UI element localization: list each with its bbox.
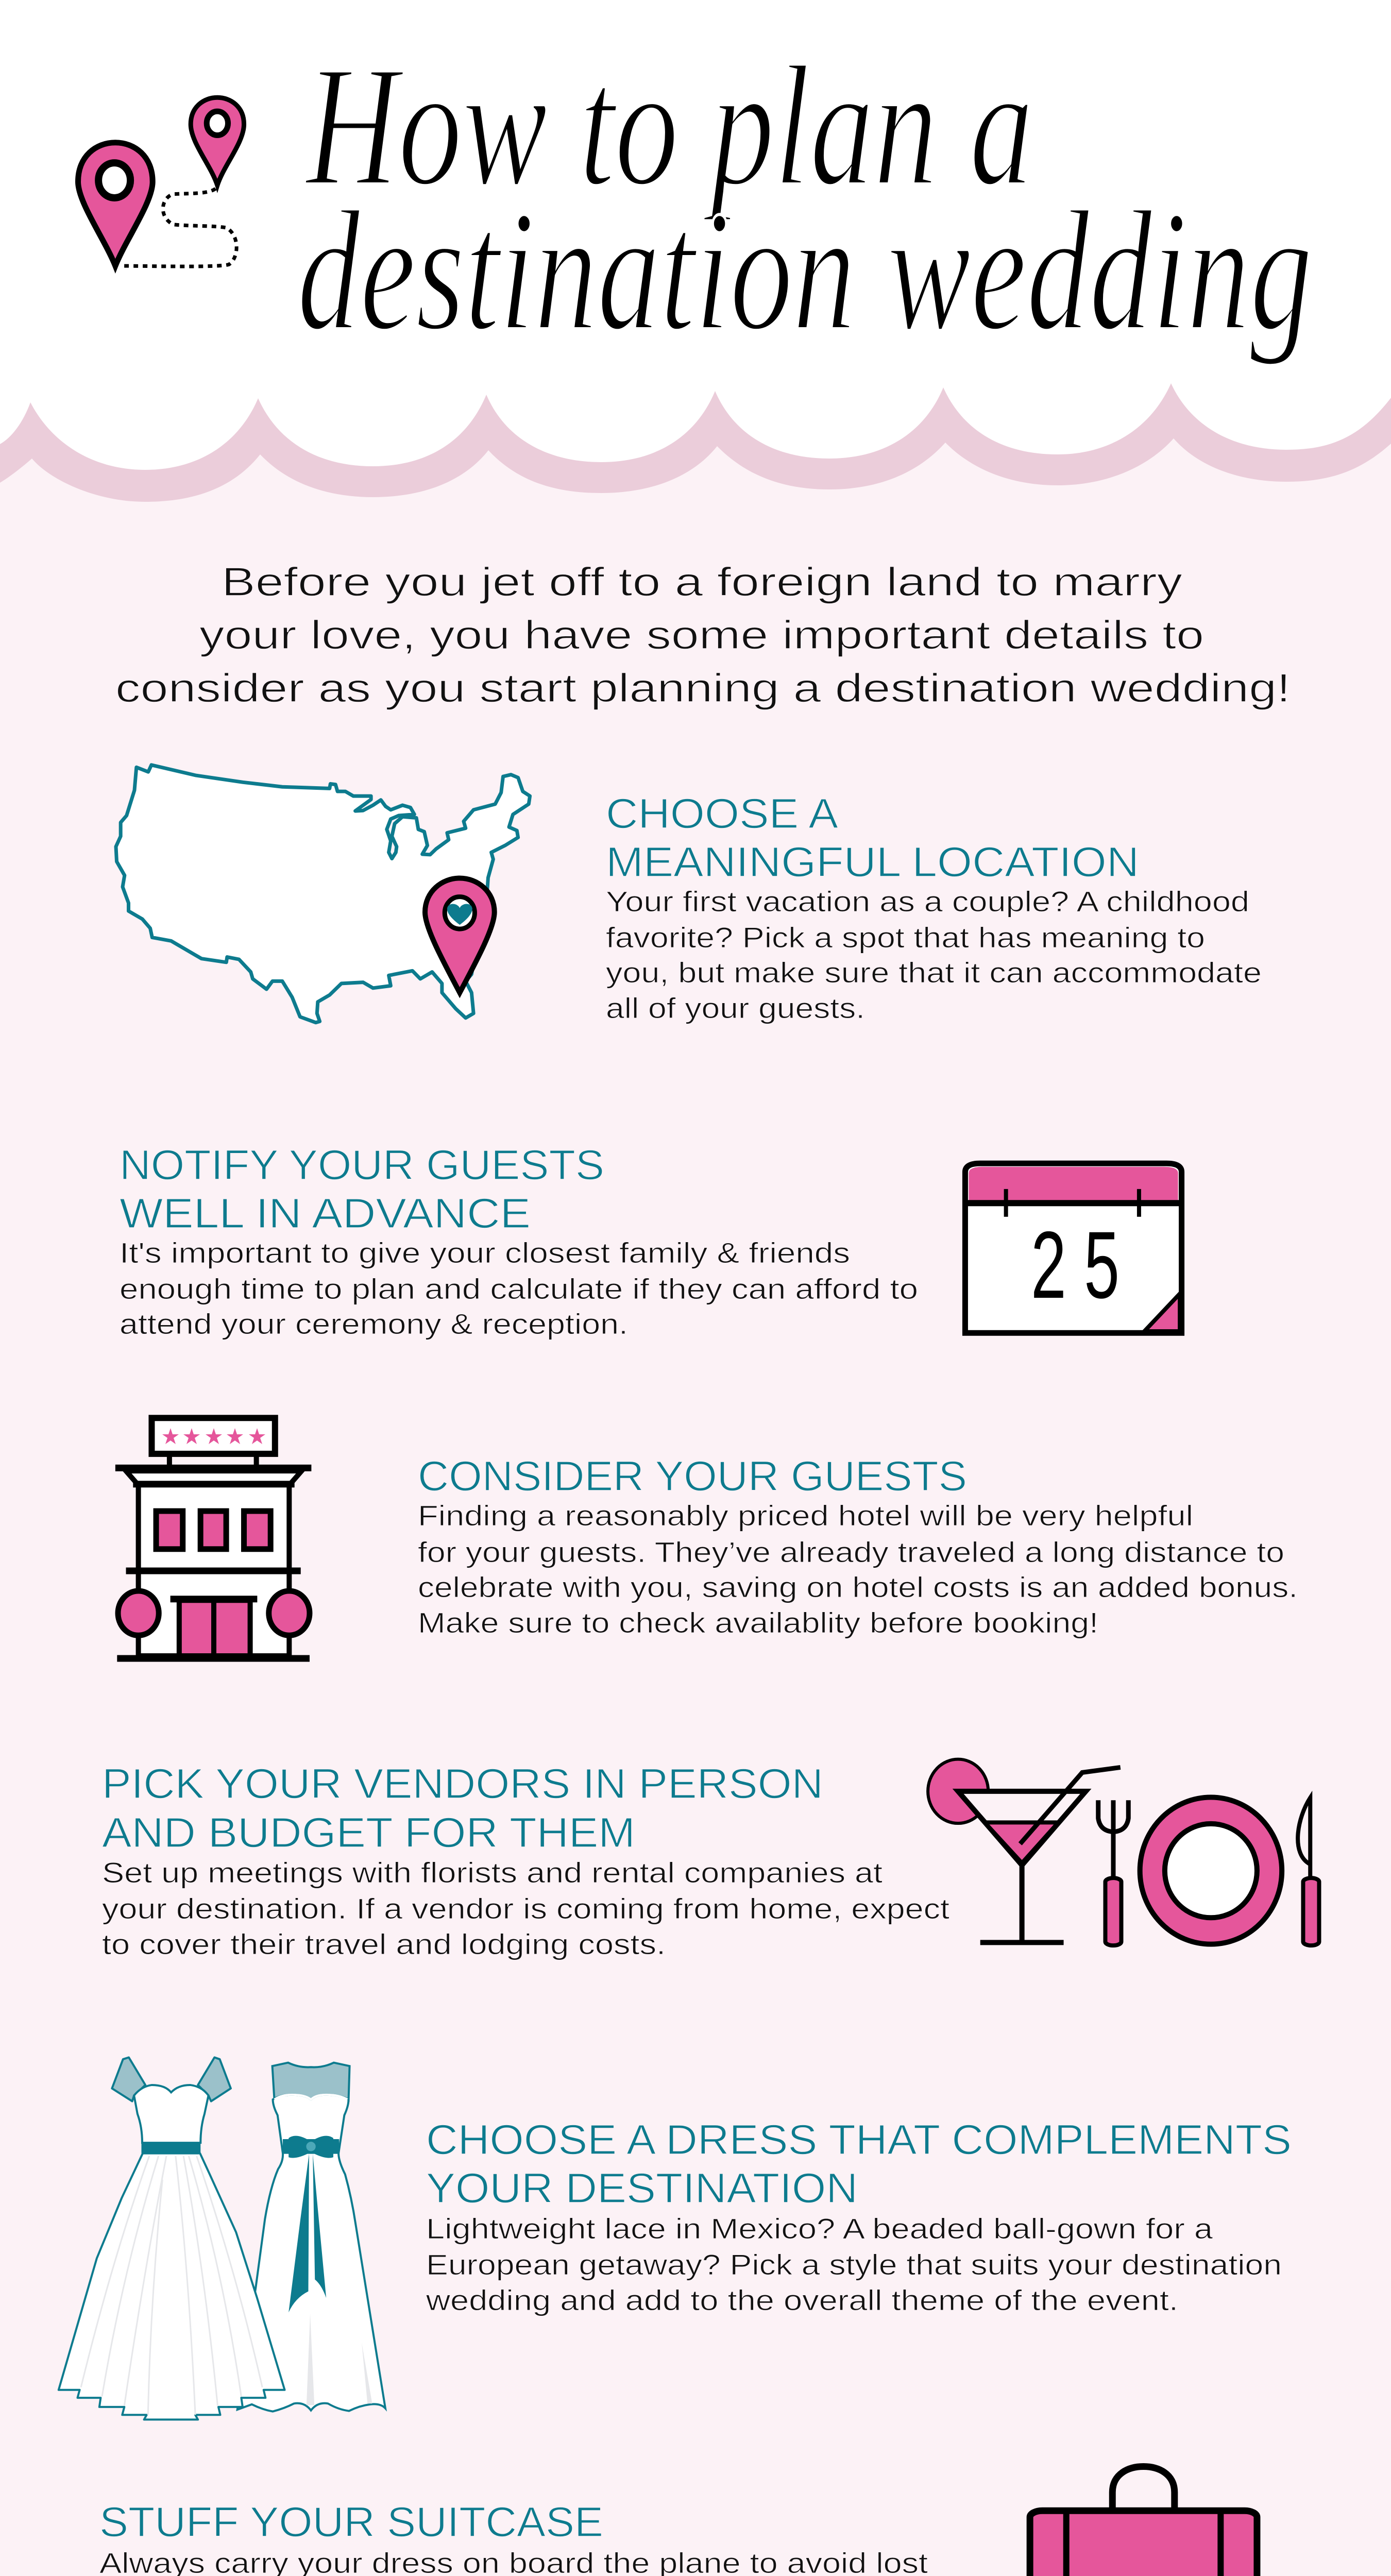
body text: wedding and add to the overall theme of the event. bbox=[426, 2284, 1178, 2316]
heading: MEANINGFUL LOCATION bbox=[606, 839, 1139, 886]
title: How to plan a bbox=[304, 30, 1033, 222]
heading: CONSIDER YOUR GUESTS bbox=[418, 1453, 967, 1500]
intro text: consider as you start planning a destination wedding! bbox=[115, 665, 1291, 710]
panel: choose a meaningful location bbox=[116, 765, 1262, 1024]
intro text: your love, you have some important details to bbox=[199, 612, 1204, 657]
intro text bbox=[115, 559, 1291, 710]
heading bbox=[102, 1760, 823, 1856]
body text: celebrate with you, saving on hotel costs is an added bonus. bbox=[418, 1571, 1298, 1603]
panel: choose a dress bbox=[59, 2057, 1292, 2419]
body text: all of your guests. bbox=[606, 992, 865, 1024]
body text bbox=[120, 1236, 918, 1340]
icon: calendar bbox=[965, 1163, 1182, 1333]
heading: WELL IN ADVANCE bbox=[120, 1190, 531, 1237]
body text: enough time to plan and calculate if they can afford to bbox=[120, 1273, 918, 1305]
heading: PICK YOUR VENDORS IN PERSON bbox=[102, 1760, 823, 1807]
body text: favorite? Pick a spot that has meaning to bbox=[606, 921, 1205, 954]
heading: NOTIFY YOUR GUESTS bbox=[120, 1142, 604, 1189]
body text bbox=[102, 1856, 950, 1960]
panel: notify your guests bbox=[120, 1142, 1182, 1340]
body text: Your first vacation as a couple? A childhood bbox=[606, 885, 1249, 918]
panel: pick your vendors bbox=[102, 1759, 1319, 1960]
heading: YOUR DESTINATION bbox=[426, 2165, 858, 2212]
icon: hotel bbox=[115, 1418, 311, 1658]
body text: attend your ceremony & reception. bbox=[120, 1308, 628, 1340]
title bbox=[297, 30, 1313, 366]
intro text: Before you jet off to a foreign land to marry bbox=[222, 559, 1182, 604]
panel: consider your guests bbox=[115, 1418, 1298, 1658]
body text bbox=[426, 2212, 1282, 2316]
heading: CHOOSE A DRESS THAT COMPLEMENTS bbox=[426, 2116, 1292, 2163]
heading bbox=[606, 790, 1139, 886]
body text: you, but make sure that it can accommodate bbox=[606, 956, 1262, 989]
icon: calendar: 2 5 bbox=[1031, 1212, 1119, 1318]
icon: map pins with dotted route bbox=[78, 97, 244, 266]
heading: STUFF YOUR SUITCASE bbox=[99, 2499, 603, 2546]
body text: Lightweight lace in Mexico? A beaded ball-gown for a bbox=[426, 2212, 1213, 2245]
body text bbox=[418, 1499, 1298, 1639]
body text: to cover their travel and lodging costs. bbox=[102, 1928, 666, 1960]
body text: Finding a reasonably priced hotel will be very helpful bbox=[418, 1499, 1193, 1532]
body text: It's important to give your closest family & friends bbox=[120, 1236, 850, 1269]
heading: CHOOSE A bbox=[606, 790, 838, 837]
heading bbox=[120, 1142, 604, 1237]
body text: Set up meetings with florists and rental companies at bbox=[102, 1856, 883, 1889]
heading: AND BUDGET FOR THEM bbox=[102, 1809, 635, 1856]
icon: cocktail and place setting bbox=[928, 1759, 1319, 1945]
body text: your destination. If a vendor is coming from home, expect bbox=[102, 1892, 950, 1925]
icon: USA map with pin bbox=[116, 765, 530, 1023]
body text: Make sure to check availablity before booking! bbox=[418, 1606, 1098, 1639]
panel: stuff your suitcase bbox=[99, 2467, 1257, 2576]
icon: wedding dresses bbox=[59, 2057, 385, 2419]
icon: suitcase bbox=[1030, 2467, 1257, 2576]
icon: hotel stars bbox=[162, 1428, 265, 1444]
body text: for your guests. They’ve already traveled a long distance to bbox=[418, 1536, 1284, 1568]
heading bbox=[426, 2116, 1292, 2212]
top scalloped border bbox=[0, 0, 1391, 502]
body text bbox=[606, 885, 1262, 1024]
body text: European getaway? Pick a style that suits your destination bbox=[426, 2248, 1282, 2281]
